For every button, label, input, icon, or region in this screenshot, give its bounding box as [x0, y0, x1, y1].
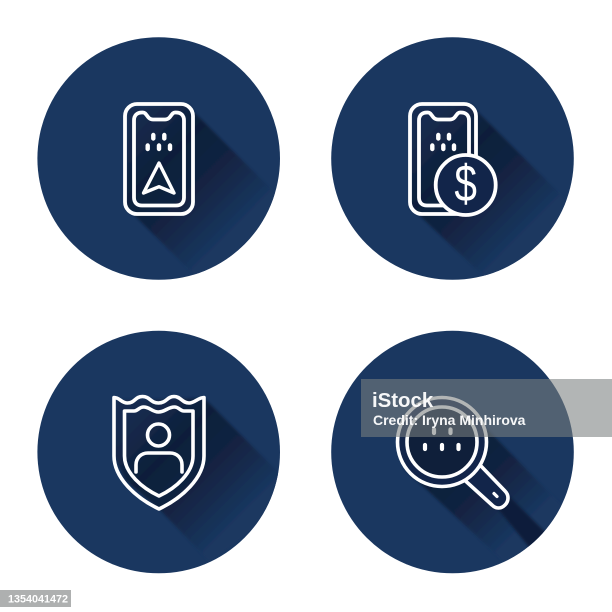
long shadow — [405, 429, 562, 562]
stock image id tag: 1354041472 — [8, 594, 68, 606]
icon: dollar coin — [436, 154, 496, 215]
handle shadow — [498, 496, 545, 547]
icon: navigation arrow — [144, 163, 174, 193]
panel: phone with navigation arrow — [37, 37, 280, 280]
long shadow — [412, 104, 567, 276]
icon: person — [148, 424, 170, 446]
panel: magnifying glass — [331, 330, 574, 574]
icon: rain dots — [148, 135, 170, 149]
icon: phone — [125, 104, 193, 214]
stock image id tag — [0, 590, 71, 607]
panel: shield with person — [37, 331, 300, 573]
long shadow — [127, 104, 276, 275]
watermark: iStock: iStock — [372, 390, 434, 412]
long shadow — [116, 398, 278, 562]
icon: shield — [114, 396, 204, 509]
icon: rain dots — [425, 430, 458, 449]
circle background — [331, 37, 574, 280]
watermark: credit: Credit: Iryna Minhirova — [373, 412, 526, 428]
panel: phone with dollar coin — [331, 37, 574, 280]
icon: magnifier — [398, 398, 508, 508]
icon: dollar coin: $ — [454, 154, 477, 212]
circle background — [331, 331, 574, 573]
icon: rain dots — [432, 135, 454, 149]
watermark band — [361, 379, 612, 437]
icon: phone — [410, 104, 476, 214]
circle background — [37, 331, 280, 573]
circle background — [37, 37, 280, 280]
